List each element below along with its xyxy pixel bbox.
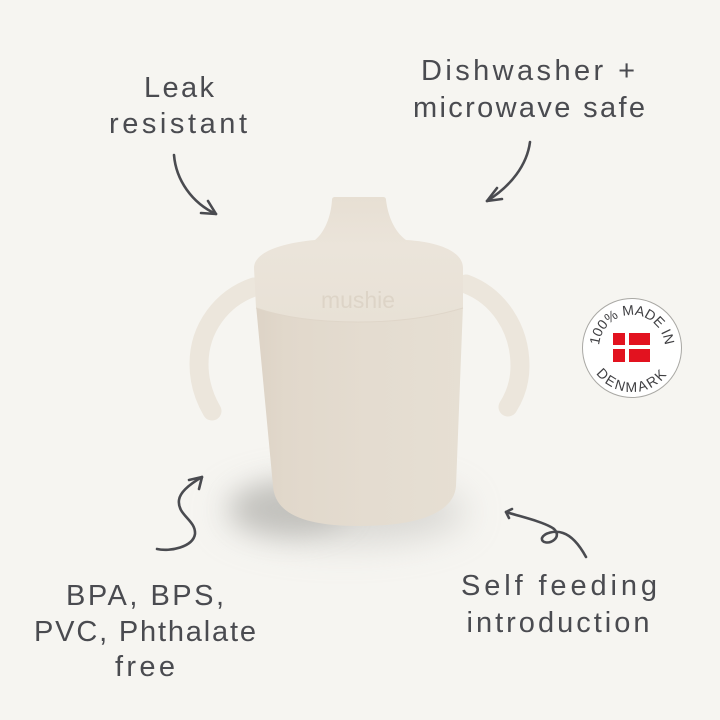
label: BPA free: free bbox=[115, 651, 175, 683]
left handle bbox=[199, 287, 254, 411]
label: leak resistant: Leak bbox=[144, 72, 214, 104]
arrow: self feeding bbox=[506, 509, 586, 557]
product: training cup bbox=[199, 197, 520, 526]
label: leak resistant bbox=[109, 72, 247, 140]
badge: 100% made in Denmark bbox=[582, 298, 682, 398]
arrow: leak resistant bbox=[174, 155, 216, 214]
cup body bbox=[256, 305, 463, 526]
label: self feeding introduction: introduction bbox=[466, 607, 650, 639]
label: dishwasher and microwave safe bbox=[413, 55, 645, 124]
label: dishwasher and microwave safe: Dishwasher + bbox=[421, 55, 635, 87]
arrow: dishwasher bbox=[487, 142, 530, 201]
label: self feeding introduction bbox=[461, 570, 657, 639]
right handle bbox=[466, 284, 520, 407]
label: leak resistant: resistant bbox=[109, 108, 247, 140]
label: BPA free bbox=[34, 580, 256, 683]
label: BPA free: BPA, BPS, bbox=[66, 580, 224, 612]
label: self feeding introduction: Self feeding bbox=[461, 570, 657, 602]
label: BPA free: PVC, Phthalate bbox=[34, 616, 256, 648]
label: dishwasher and microwave safe: microwave safe bbox=[413, 92, 645, 124]
badge: 100% made in Denmark: DENMARK bbox=[596, 368, 667, 392]
arrow: BPA free bbox=[157, 477, 202, 550]
badge: 100% made in Denmark: 100% MADE IN bbox=[590, 305, 674, 344]
brand emboss: mushie bbox=[321, 287, 395, 313]
lid and spout bbox=[254, 197, 463, 322]
cup shadow bbox=[223, 480, 467, 544]
icon: Danish flag bbox=[613, 333, 650, 362]
lid seam bbox=[256, 308, 463, 322]
